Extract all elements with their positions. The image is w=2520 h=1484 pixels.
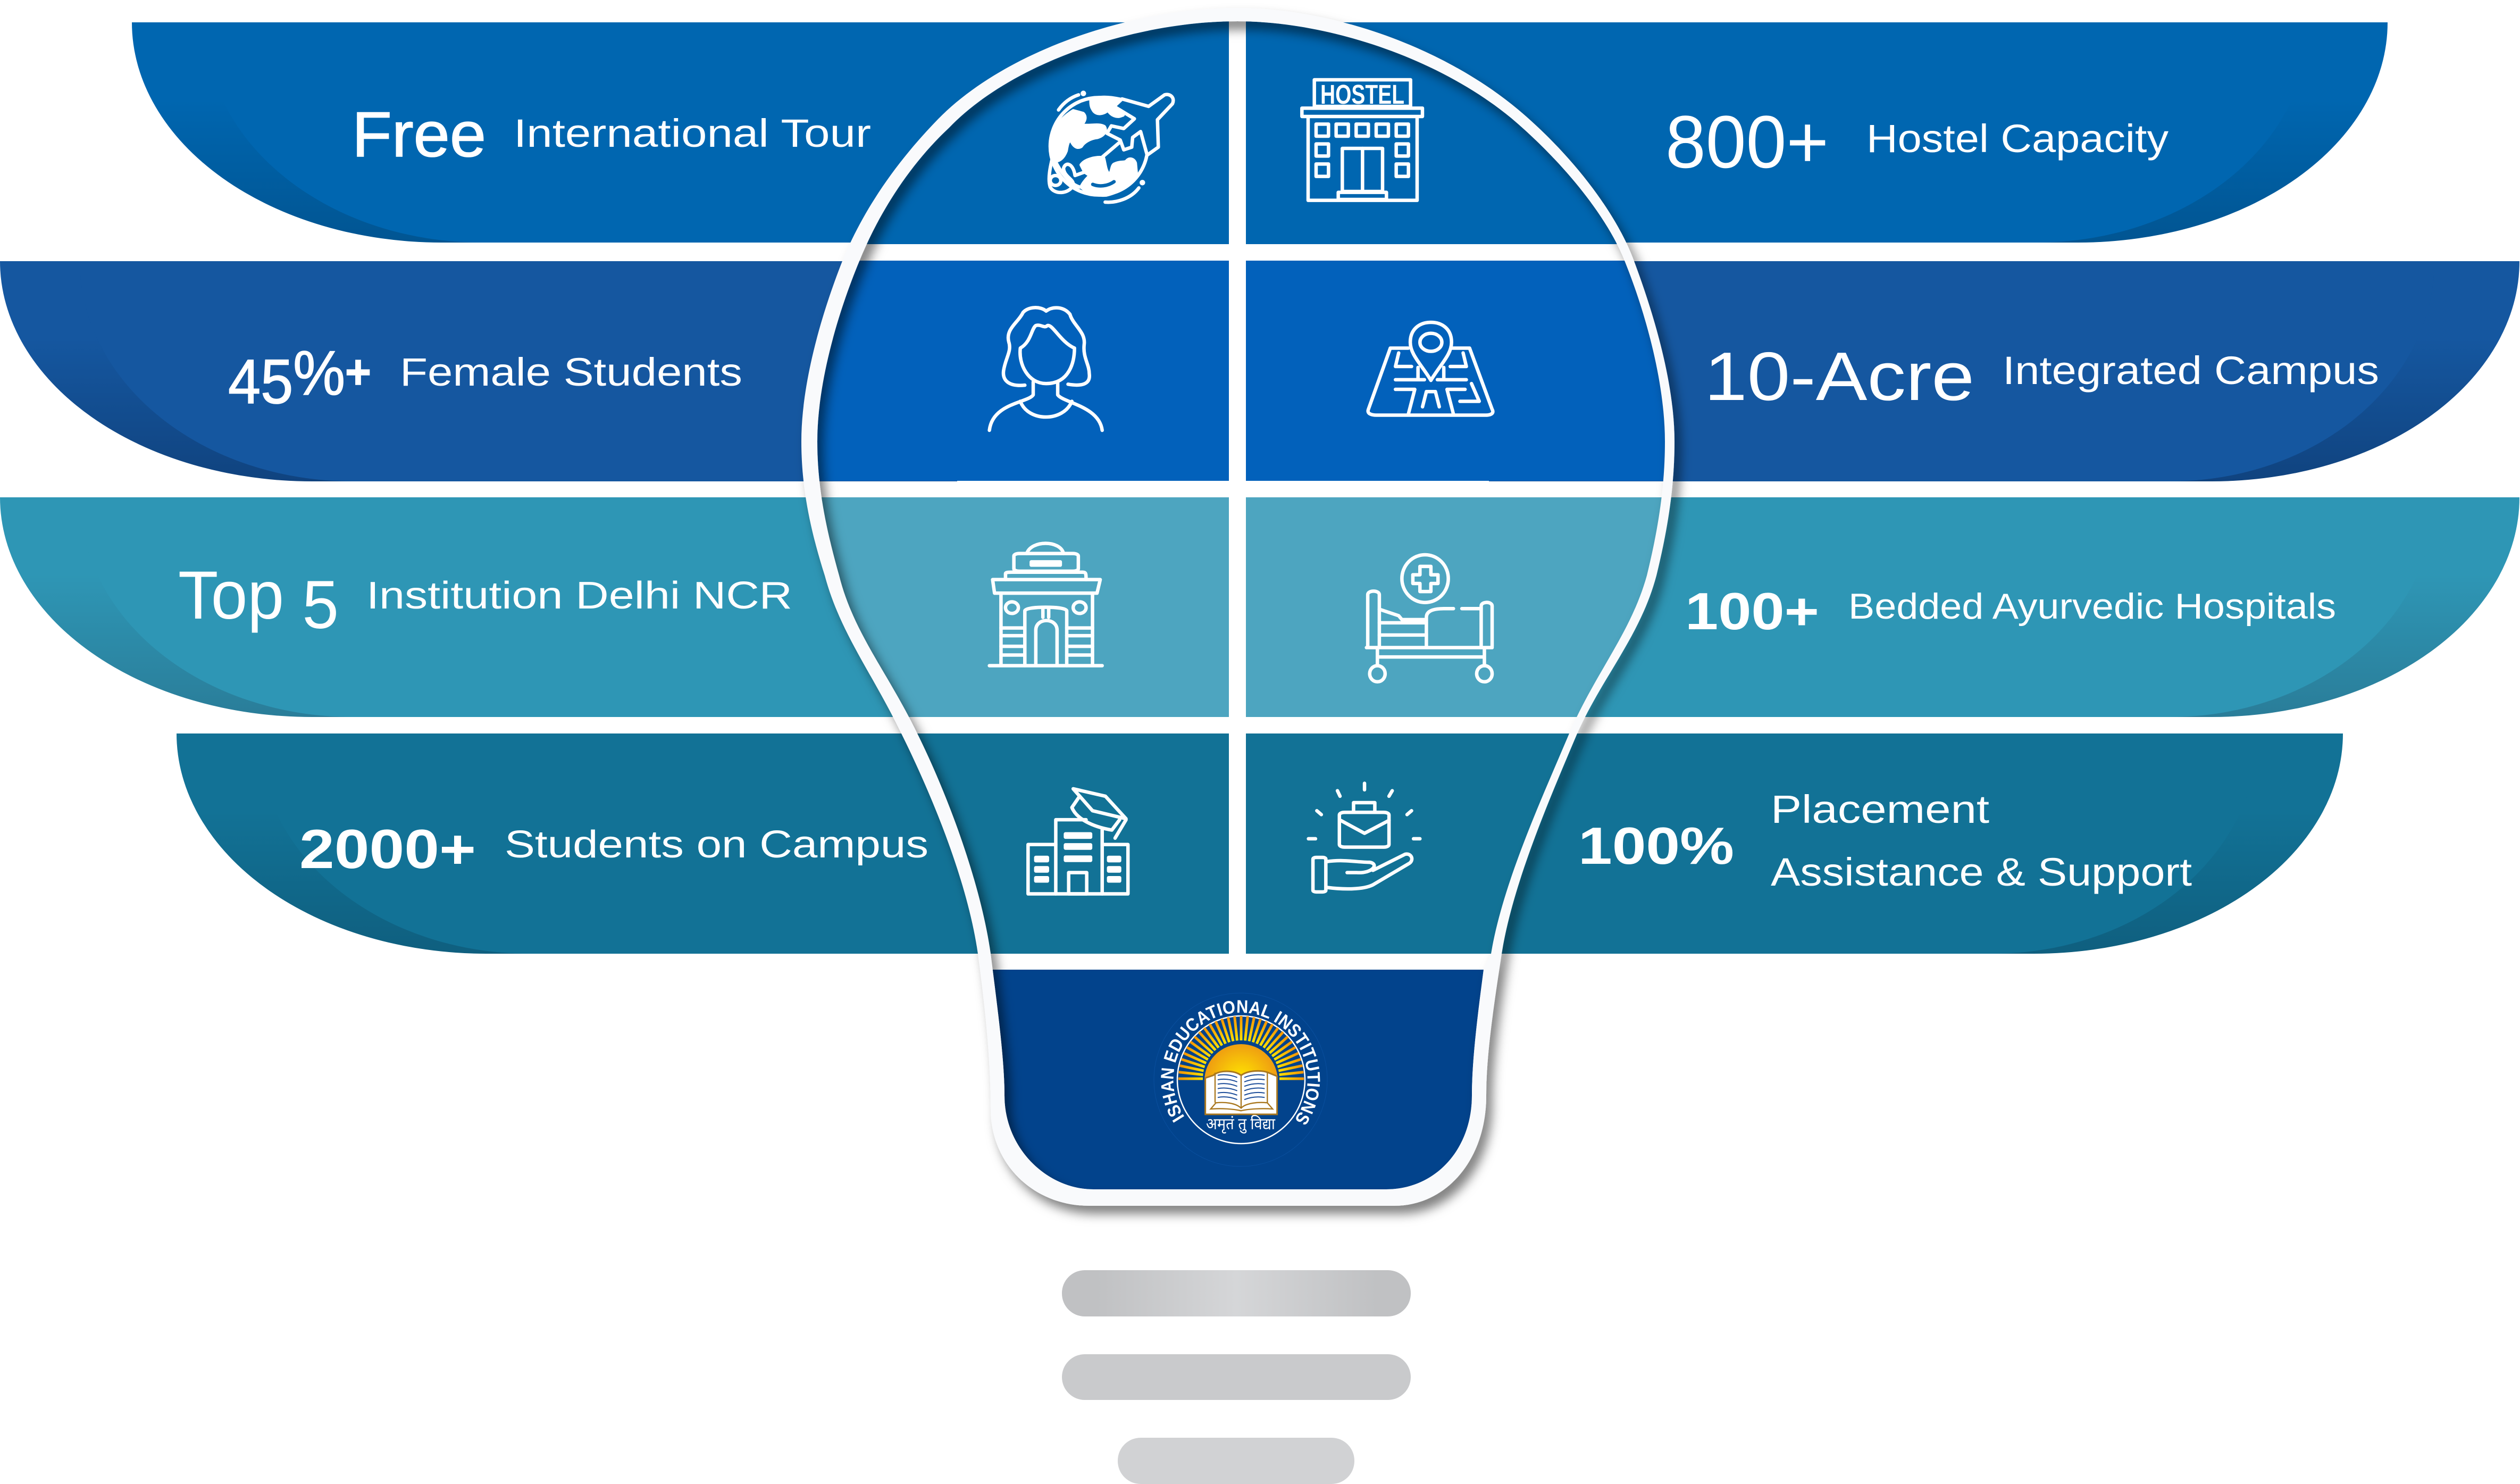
stat: integrated campus: [1704, 338, 2379, 415]
stat: placement assistance: Placement: [1771, 787, 1990, 831]
stat: female students: 45: [228, 347, 298, 417]
stat: top 5 institution: Institution Delhi NCR: [366, 574, 792, 617]
stat: free international tour: Free: [352, 99, 486, 170]
stat: ayurvedic hospitals: Bedded Ayurvedic Hospitals: [1848, 586, 2336, 627]
stat: ayurvedic hospitals: 100+: [1685, 582, 1819, 640]
bar: hostel capacity (right): [1246, 22, 2388, 243]
stat: top 5 institution: [178, 557, 792, 643]
stat: students on campus: [299, 819, 928, 880]
icon label: hostel sign: HOSTEL: [1320, 79, 1404, 110]
stat: students on campus: 2000+: [299, 819, 476, 880]
bulb interior panels: [817, 21, 1665, 1189]
icon: woman: [990, 307, 1102, 430]
stat: female students: Female Students: [400, 350, 742, 394]
stat: hostel capacity: 800+: [1665, 100, 1829, 184]
stat: female students: [228, 338, 742, 417]
icon: india gate institution: [990, 544, 1102, 665]
bar: top 5 institution (left): [0, 497, 957, 717]
icon: university with graduation cap: [1028, 789, 1128, 894]
icon: hostel building: [1302, 80, 1422, 201]
stat: free international tour: International Tour: [514, 111, 871, 155]
bar: female students (left): [0, 261, 957, 481]
icon: hospital bed: [1367, 555, 1492, 682]
bar: free international tour (left): [132, 22, 1229, 243]
stat: hostel capacity: Hostel Capacity: [1866, 116, 2169, 161]
bar: students on campus (left): [177, 733, 1064, 954]
stat: integrated campus: 10-Acre: [1704, 338, 1974, 415]
stat: students on campus: Students on Campus: [505, 823, 928, 866]
stat: placement assistance: 100%: [1578, 816, 1734, 875]
stat: top 5 institution: 5: [302, 567, 339, 643]
icon: campus map pin: [1368, 322, 1493, 415]
stat: top 5 institution: Top: [178, 557, 288, 633]
stat: placement assistance: [1578, 787, 2192, 894]
bar: ayurvedic hospitals (right): [1489, 497, 2519, 717]
stat: ayurvedic hospitals: [1685, 582, 2336, 640]
bulb screw bar 2: [1062, 1354, 1411, 1400]
bulb screw bar 1: [1062, 1270, 1411, 1316]
stat: female students: %: [293, 338, 345, 408]
stat: placement assistance: Assistance & Support: [1771, 850, 2192, 894]
icon: globe and airplane: [1049, 93, 1173, 202]
bulb screw bar 3: [1118, 1438, 1354, 1484]
logo: ishan educational institutions: ISHAN EDUCATIONAL INSTITUTIONS: [1161, 1000, 1320, 1124]
logo: ishan educational institutions: अमृतं तु विद्या: [1206, 1115, 1276, 1134]
bulb outline: [801, 8, 1675, 1206]
bar: integrated campus (right): [1489, 261, 2519, 481]
stat: hostel capacity: [1665, 100, 2169, 184]
stat: free international tour: [352, 99, 871, 170]
stat: female students: +: [345, 346, 371, 399]
bar: placement assistance (right): [1383, 733, 2343, 954]
stat: integrated campus: Integrated Campus: [2003, 348, 2379, 393]
icon: hand holding briefcase: [1309, 783, 1420, 892]
